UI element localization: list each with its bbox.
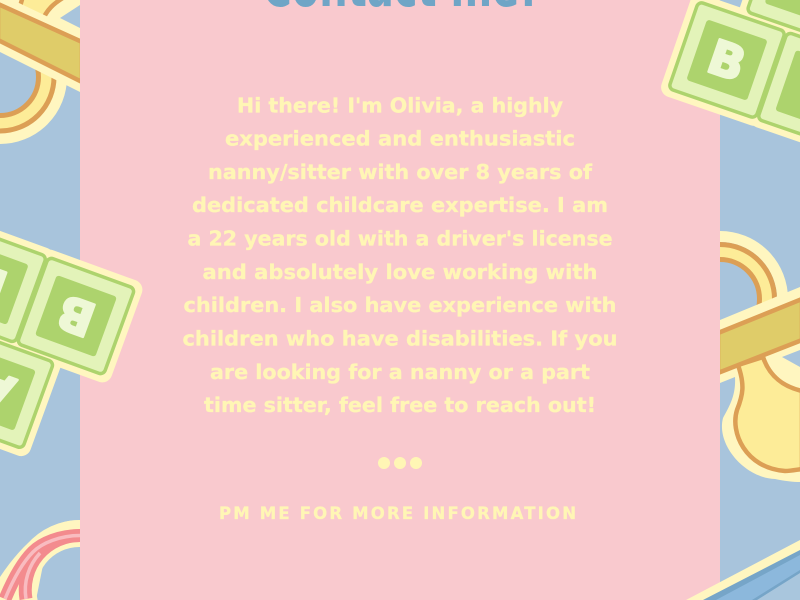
panel: pink card [80, 0, 720, 600]
text block: introduction: children who have disabilities. If you [182, 326, 618, 350]
icon: building blocks top right [658, 0, 800, 159]
icon: ruler bottom right [686, 540, 800, 600]
text block: introduction: a 22 years old with a driver's license [188, 226, 612, 250]
text block: introduction: children. I also have experience with [184, 293, 616, 317]
icon: pacifier right [658, 236, 800, 482]
text block: introduction: time sitter, feel free to reach out! [204, 393, 596, 417]
text block: introduction [182, 94, 618, 417]
icon: building blocks left [0, 215, 145, 476]
icon: pacifier top left [0, 0, 82, 138]
icon: building blocks left: B [50, 283, 103, 347]
text block: introduction: nanny/sitter with over 8 years of [208, 160, 593, 184]
text block: introduction: Hi there! I'm Olivia, a highly [237, 94, 563, 118]
call to action: PM ME FOR MORE INFORMATION [219, 504, 576, 523]
icon: ring bottom left [0, 520, 80, 600]
icon: building blocks top right: B [701, 30, 752, 93]
text block: introduction: and absolutely love working with [202, 260, 598, 284]
text block: introduction: are looking for a nanny or a part [210, 360, 590, 384]
text block: introduction: experienced and enthusiastic [225, 126, 575, 150]
dots separator [378, 457, 422, 469]
text block: introduction: dedicated childcare expertise. I am [192, 193, 608, 217]
